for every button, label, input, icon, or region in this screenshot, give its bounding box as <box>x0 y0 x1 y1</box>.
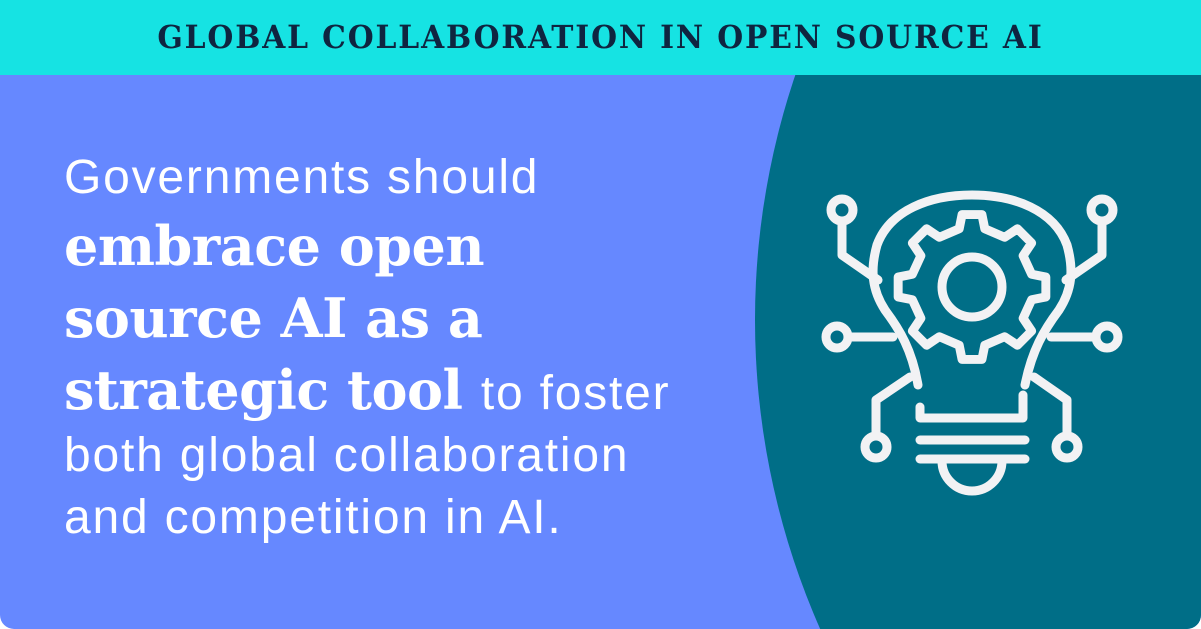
main statement text: both global collaboration <box>64 429 629 482</box>
main statement text <box>64 151 670 544</box>
main statement text: embrace open <box>64 214 484 278</box>
main statement text: strategic tool to foster <box>64 358 670 422</box>
main statement text: Governments should <box>64 151 539 204</box>
title banner <box>0 0 1201 75</box>
main statement text: and competition in AI. <box>64 491 563 544</box>
title banner: GLOBAL COLLABORATION IN OPEN SOURCE AI <box>157 18 1044 56</box>
main statement text: source AI as a <box>64 286 482 350</box>
